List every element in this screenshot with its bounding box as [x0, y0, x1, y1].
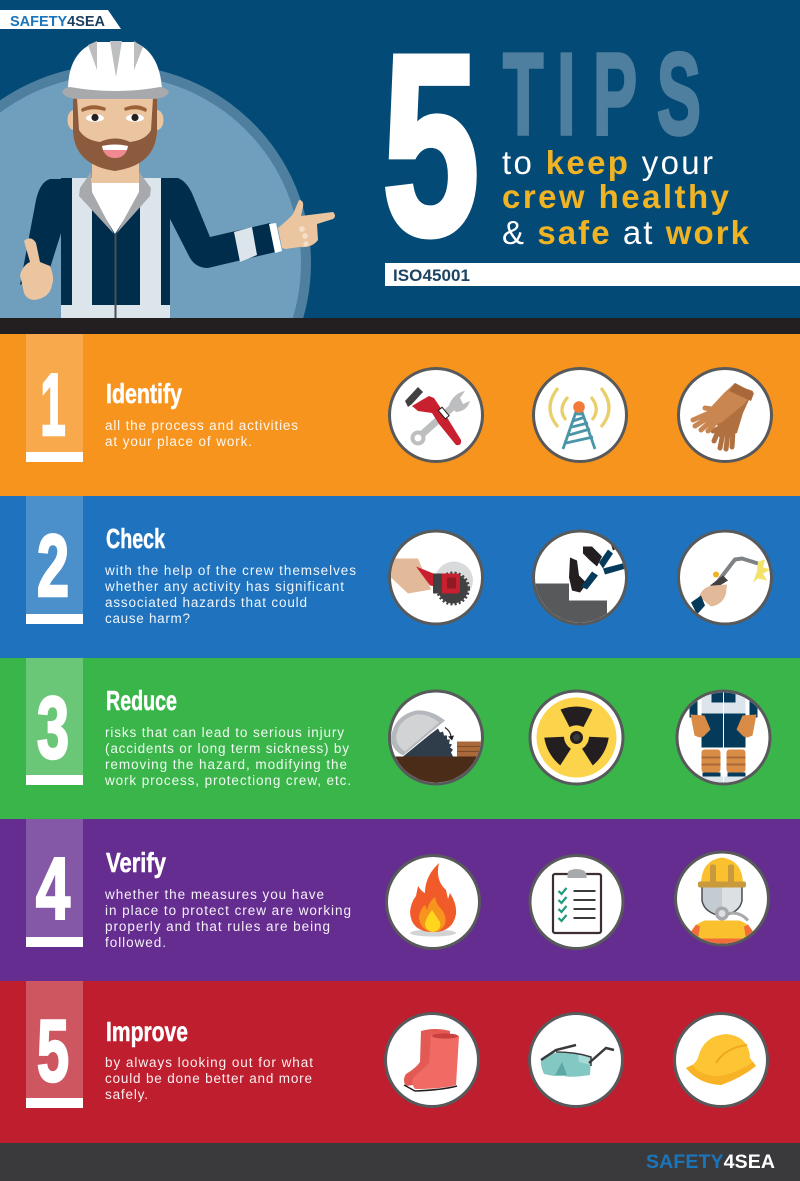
- icon: firefighter: [676, 852, 768, 946]
- header panel: [0, 0, 800, 318]
- panel 1: identify: [0, 334, 800, 496]
- text 4: whether the measures you have: [104, 887, 324, 902]
- logo tab: SAFETY4SEA: [10, 14, 106, 30]
- icon: yellow helmet: [674, 1014, 768, 1106]
- portrait circle: [0, 70, 311, 318]
- text 3: risks that can lead to serious injury: [105, 725, 344, 740]
- text 2: with the help of the crew themselves: [104, 563, 356, 578]
- text 5: [105, 1055, 313, 1102]
- icon: wrenches: [390, 368, 482, 462]
- text 3: work process, protectiong crew, etc.: [104, 773, 351, 788]
- panel 5: improve: [0, 981, 800, 1143]
- text 1: [105, 418, 298, 449]
- text 4: followed.: [105, 935, 166, 950]
- ISO bar: ISO45001: [393, 266, 470, 285]
- number tab 5: [26, 981, 83, 1108]
- text 3: [104, 725, 351, 788]
- word TIPS: TIPS: [503, 31, 701, 160]
- icon: rubber boots: [386, 1014, 478, 1106]
- icon: fire: [386, 856, 480, 948]
- text 2: [104, 563, 356, 626]
- footer logo: SAFETY4SEA: [646, 1151, 775, 1173]
- text 4: properly and that rules are being: [105, 919, 330, 934]
- torso with reflective vest: [61, 172, 170, 318]
- worker character: [20, 41, 335, 318]
- head with beard: [68, 96, 164, 183]
- icon: checklist: [530, 856, 623, 948]
- heading 2: Check: [106, 523, 165, 554]
- hard hat: [62, 41, 169, 99]
- icon: safety glasses: [530, 1014, 622, 1106]
- number tab 2: [26, 496, 83, 624]
- headline text: & safe at work: [502, 214, 750, 251]
- headline text: crew healthy: [502, 178, 730, 215]
- panel 4: verify: [0, 819, 800, 981]
- icon: stairs trip: [533, 531, 626, 628]
- icon: protective suit: [677, 691, 770, 786]
- text 3: removing the hazard, modifying the: [105, 757, 347, 772]
- logo tab: [0, 10, 121, 30]
- icon: circular saw: [390, 531, 482, 624]
- number tab 4: [26, 819, 83, 947]
- dark divider: [0, 318, 800, 334]
- heading 1: Identify: [106, 378, 182, 409]
- big number 5: 5: [382, 0, 480, 289]
- headline text: [502, 144, 750, 251]
- footer: [0, 1143, 800, 1181]
- text 5: could be done better and more: [105, 1071, 312, 1086]
- text 1: all the process and activities: [105, 418, 298, 433]
- icon: signal tower: [534, 368, 626, 462]
- text 4: in place to protect crew are working: [105, 903, 351, 918]
- number tab 3: 3: [37, 679, 69, 777]
- icon: gloves: [678, 368, 772, 462]
- text 4: [104, 887, 351, 950]
- number tab 5: 5: [37, 1002, 69, 1100]
- headline text: to keep your: [502, 144, 713, 181]
- heading 5: Improve: [106, 1016, 188, 1047]
- right arm pointing: [160, 178, 335, 268]
- text 3: (accidents or long term sickness) by: [105, 741, 349, 756]
- number tab 1: [26, 334, 83, 462]
- left arm with thumbs up: [20, 179, 72, 300]
- text 2: whether any activity has significant: [104, 579, 344, 594]
- heading 4: Verify: [106, 847, 166, 878]
- icon: radiation: [530, 691, 623, 784]
- number tab 4: 4: [36, 840, 70, 939]
- ISO bar: [385, 263, 800, 286]
- icon: table saw: [389, 691, 483, 786]
- text 2: associated hazards that could: [105, 595, 307, 610]
- number tab 3: [26, 658, 83, 785]
- number tab 2: 2: [37, 517, 69, 615]
- text 2: cause harm?: [105, 611, 190, 626]
- number tab 1: 1: [40, 356, 66, 454]
- panel 3: reduce: [0, 658, 800, 819]
- text 5: by always looking out for what: [105, 1055, 313, 1070]
- icon: welding torch: [678, 531, 772, 624]
- panel 2: check: [0, 496, 800, 658]
- text 1: at your place of work.: [105, 434, 252, 449]
- heading 3: Reduce: [106, 685, 177, 716]
- text 5: safely.: [105, 1087, 148, 1102]
